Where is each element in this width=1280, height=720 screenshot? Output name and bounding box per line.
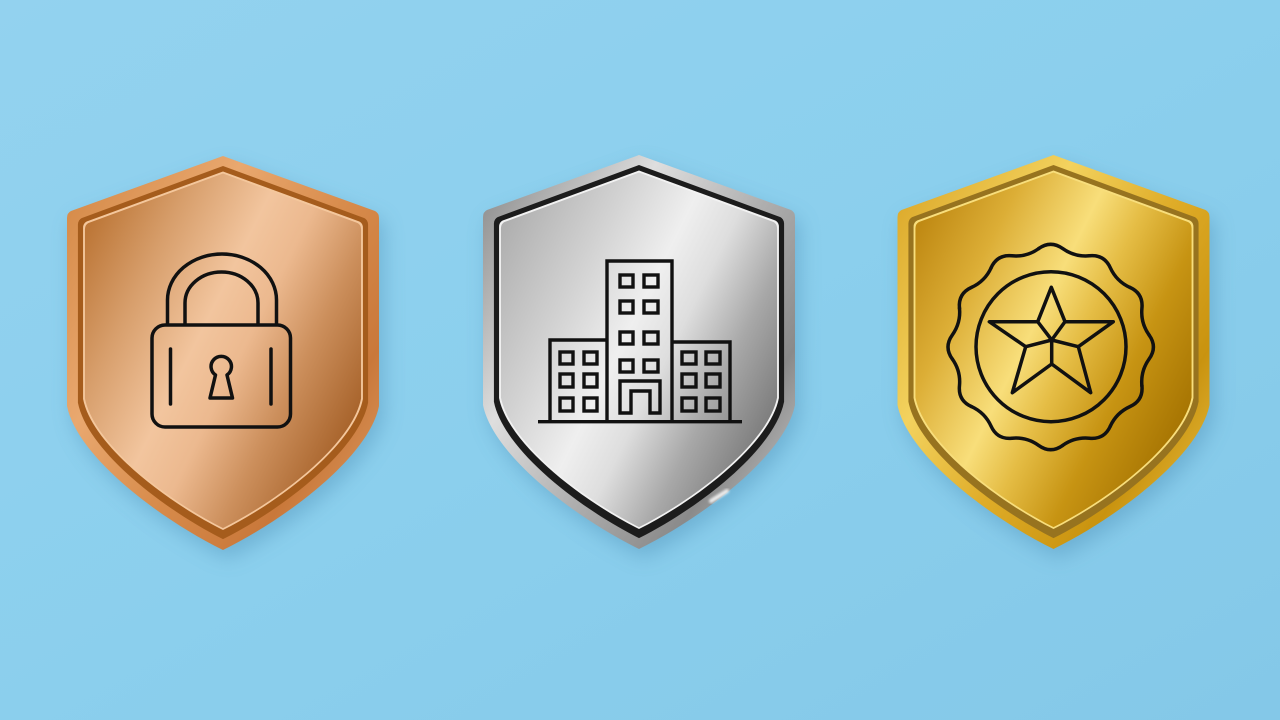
icon: padlock <box>152 254 290 427</box>
silver shield body <box>483 155 800 558</box>
icon: office buildings <box>538 261 742 422</box>
bronze shield body <box>67 156 384 559</box>
gold shield body <box>898 155 1214 558</box>
icon: star seal <box>942 239 1159 455</box>
panel: silver shield <box>483 155 800 558</box>
panel: gold shield <box>898 155 1214 558</box>
panel: bronze shield <box>67 156 384 559</box>
